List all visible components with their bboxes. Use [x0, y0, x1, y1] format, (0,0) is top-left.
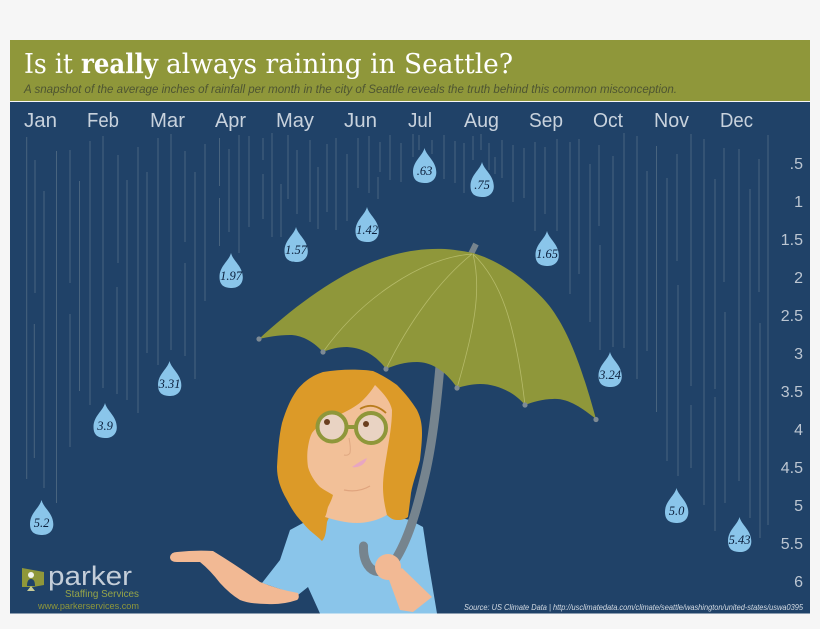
shirt	[262, 515, 437, 614]
drop: April 1.97	[220, 253, 243, 288]
month labels: Jul	[408, 110, 432, 132]
drop: January 5.2	[30, 500, 53, 535]
logo	[22, 561, 139, 611]
panel: header band	[10, 40, 810, 101]
logo wordmark: parker	[48, 561, 132, 591]
drop: March 3.31	[158, 361, 181, 396]
drop: July .63: .63	[417, 164, 432, 178]
rainfall scale in inches: 1	[794, 194, 803, 211]
month labels: Nov	[654, 110, 689, 132]
drop: January 5.2: 5.2	[34, 516, 49, 530]
rainfall scale in inches	[781, 156, 803, 591]
umbrella rib tips	[256, 336, 599, 422]
drop: October 3.24	[598, 352, 622, 387]
rainfall scale in inches: .5	[790, 156, 803, 173]
drop: March 3.31: 3.31	[158, 377, 180, 391]
raindrop values	[30, 148, 751, 552]
rainfall scale in inches: 2.5	[781, 308, 803, 325]
left arm with open hand	[170, 551, 299, 604]
umbrella	[256, 244, 599, 572]
logo icon	[22, 568, 44, 591]
drop: May 1.57: 1.57	[285, 243, 308, 257]
smile	[344, 486, 370, 491]
nose	[344, 438, 350, 455]
drop: December 5.43: 5.43	[729, 533, 750, 547]
hand gripping umbrella	[375, 554, 432, 612]
month labels: Jan	[24, 110, 57, 132]
panel: chart background	[10, 102, 810, 614]
drop: May 1.57	[284, 227, 308, 262]
umbrella tip	[471, 244, 476, 254]
glasses	[318, 412, 386, 443]
rain streaks	[27, 133, 768, 538]
month labels: Feb	[87, 110, 119, 132]
title: Is it	[24, 49, 73, 80]
drop: September 1.65: 1.65	[536, 247, 558, 261]
eyebrow	[360, 406, 386, 413]
month labels: Oct	[593, 110, 623, 132]
month labels: Aug	[464, 110, 499, 132]
rainfall scale in inches: 3	[794, 346, 803, 363]
subtitle: A snapshot of the average inches of rainfall per month in the city of Seattle reveals the truth behind this common misconception.	[23, 84, 677, 96]
umbrella shaft and handle	[363, 366, 440, 572]
month labels: Sep	[529, 110, 563, 132]
woman illustration	[170, 370, 437, 614]
rainfall scale in inches: 3.5	[781, 384, 803, 401]
drop: August .75: .75	[474, 178, 490, 192]
drop: April 1.97: 1.97	[220, 269, 243, 283]
drop: September 1.65	[536, 231, 559, 266]
drop: November 5.0: 5.0	[669, 504, 685, 518]
drop: July .63	[413, 148, 436, 183]
month labels: Dec	[720, 110, 753, 132]
month labels	[24, 110, 753, 132]
month labels: May	[276, 110, 314, 132]
rainfall scale in inches: 5.5	[781, 536, 803, 553]
title: always raining in Seattle?	[166, 49, 513, 80]
month labels: Apr	[215, 110, 246, 132]
drop: December 5.43	[728, 517, 751, 552]
rainfall scale in inches: 1.5	[781, 232, 803, 249]
drop: October 3.24: 3.24	[598, 368, 621, 382]
umbrella ribs	[323, 254, 525, 405]
drop: November 5.0	[665, 488, 688, 523]
hair	[277, 370, 422, 541]
drop: February 3.9	[94, 403, 117, 438]
drop: February 3.9: 3.9	[96, 419, 114, 433]
lips	[352, 458, 367, 467]
month labels: Mar	[150, 110, 185, 132]
drop: June 1.42	[356, 207, 379, 242]
month labels: Jun	[344, 110, 377, 132]
website: www.parkerservices.com	[37, 601, 139, 611]
rainfall scale in inches: 2	[794, 270, 803, 287]
face and neck	[307, 385, 392, 523]
rainfall scale in inches: 4	[794, 422, 803, 439]
rainfall scale in inches: 4.5	[781, 460, 803, 477]
title: really	[81, 49, 159, 80]
rainfall scale in inches: 5	[794, 498, 803, 515]
umbrella canopy	[259, 249, 596, 419]
logo tagline: Staffing Services	[65, 588, 139, 600]
drop: August .75	[470, 162, 494, 197]
drop: June 1.42: 1.42	[356, 223, 378, 237]
rainfall scale in inches: 6	[794, 574, 803, 591]
